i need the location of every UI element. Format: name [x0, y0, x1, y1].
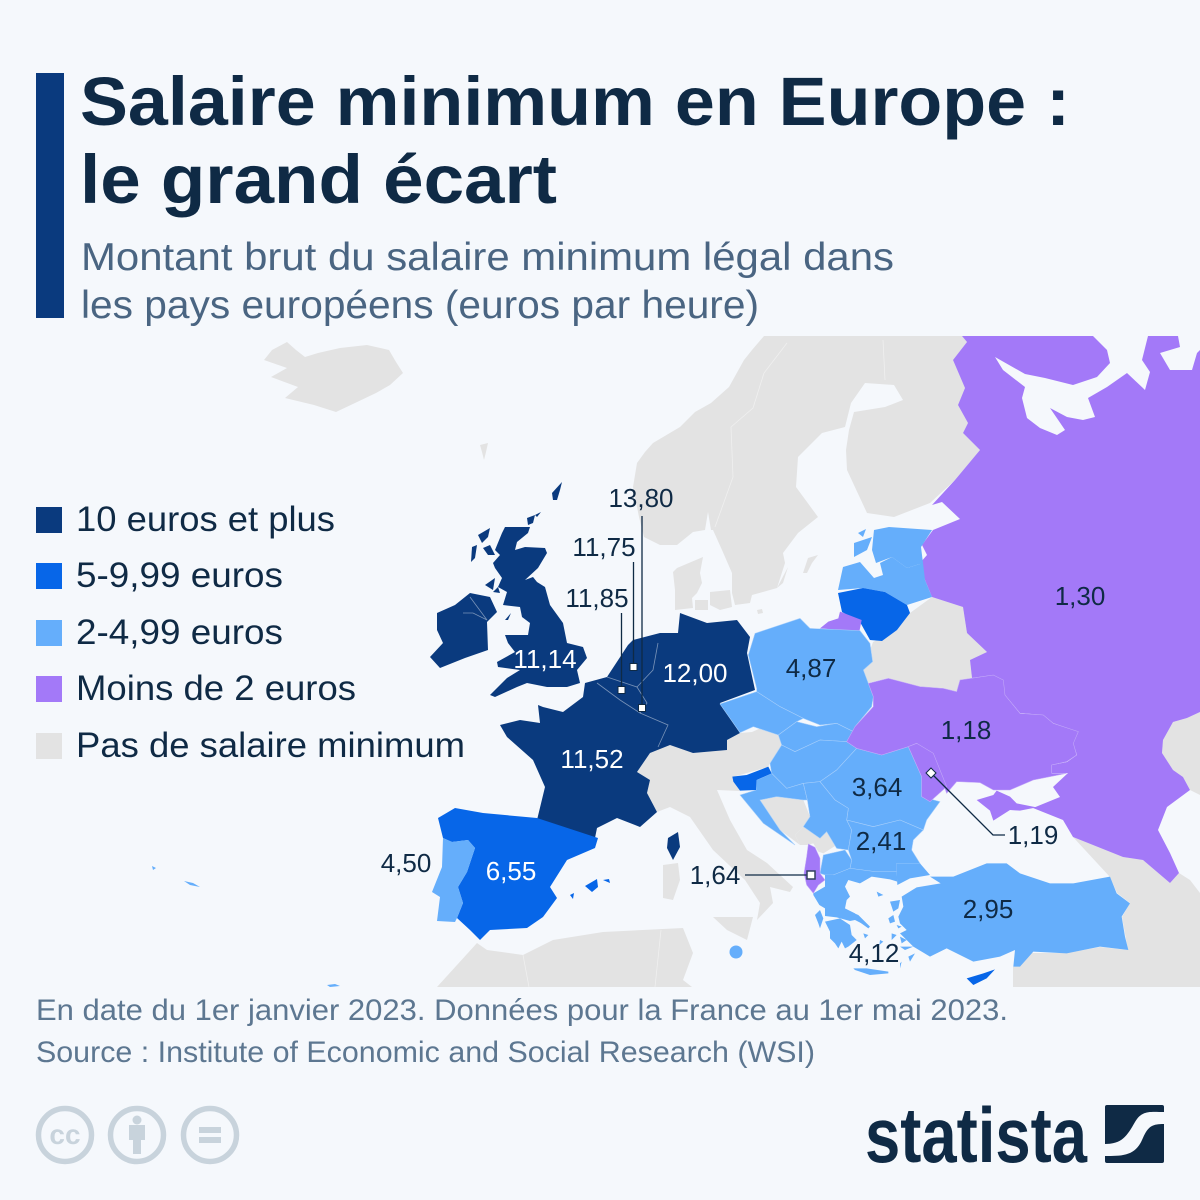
France, Benelux and Germany: [500, 613, 755, 838]
Slovenia: [732, 767, 772, 791]
legend: 10 euros et plus: 10 euros et plus: [76, 500, 335, 539]
title: Salaire minimum en Europe :: [80, 63, 1070, 140]
map of Europe: [152, 336, 1200, 987]
Slovakia: [778, 722, 853, 752]
Ireland: [430, 593, 497, 668]
Spain: 6,55: [438, 808, 598, 940]
Faroe Islands: [480, 443, 488, 460]
Scandinavia: [633, 336, 980, 605]
Greek islands: [815, 892, 915, 975]
White Sea: [995, 336, 1150, 435]
Belarus: [863, 597, 987, 692]
title accent bar: [36, 73, 64, 318]
map value labels: 11,75: [572, 532, 636, 562]
map value labels: 13,80: [608, 483, 674, 513]
leader: Luxembourg 13,80: [638, 516, 646, 712]
leader: Belgium 11,85: [618, 613, 625, 694]
Serbia: [803, 782, 852, 850]
statista logo: statista: [865, 1091, 1087, 1179]
title: [80, 63, 1070, 218]
Greek mainland border: [833, 868, 897, 875]
Portugal: 4,50: [432, 838, 475, 922]
legend: [36, 500, 465, 765]
leader: Netherlands 11,75: [630, 562, 637, 670]
map value labels: 1,64: [690, 860, 740, 890]
map value labels: 1,18: [941, 715, 991, 745]
leader: Moldova 1,19: [926, 768, 1005, 835]
Greece: 4,12: [813, 868, 897, 923]
Western European borders: [463, 597, 668, 747]
Malta: [730, 946, 742, 958]
Russia: 1,30: [920, 336, 1200, 883]
map value labels: 11,85: [565, 583, 629, 613]
Estonia, Latvia and islands: [838, 527, 932, 605]
Romania: 3,64: [820, 747, 940, 830]
map value labels: 12,00: [662, 658, 728, 688]
subtitle: les pays européens (euros par heure): [81, 284, 759, 327]
map value labels: 6,55: [486, 856, 536, 886]
legend: moins de 2 euros: Moins de 2 euros: [76, 669, 356, 708]
map value labels: 2,95: [963, 894, 1013, 924]
footnote and source: [36, 994, 1008, 1069]
Atlantic islands: [152, 866, 340, 987]
legend: pas de salaire minimum: Pas de salaire minimum: [76, 726, 465, 765]
icon: creative commons: cc: [49, 1119, 81, 1150]
Croatia: [740, 773, 807, 845]
Corsica: [667, 832, 680, 860]
Cyprus: [967, 969, 995, 985]
icon: creative commons: [38, 1108, 92, 1162]
North Africa: [437, 928, 693, 987]
Lithuania: [838, 588, 910, 641]
Denmark and Baltic islands: [673, 555, 818, 614]
leader: Albania 1,64: [745, 871, 815, 879]
Sardinia and Sicily: [663, 863, 753, 940]
icon: attribution: [110, 1108, 164, 1162]
Barents Sea inlet: [1160, 336, 1200, 370]
Balearic Islands: [570, 879, 610, 899]
Iceland: [264, 342, 403, 412]
Poland: 4,87: [748, 618, 873, 732]
map value labels: 4,50: [381, 848, 431, 878]
map value labels: 11,14: [513, 644, 577, 674]
Albania: 1,64: [804, 844, 825, 893]
map value labels: 4,12: [849, 938, 899, 968]
map value labels: 3,64: [852, 772, 902, 802]
Peloponnese: [825, 918, 857, 948]
British outer islands: [471, 482, 562, 620]
Bulgaria: 2,41: [847, 820, 923, 872]
legend: 5-9,99 euros: 5-9,99 euros: [76, 556, 283, 595]
title: le grand écart: [80, 141, 557, 218]
Bosnia: [760, 797, 810, 845]
legend: 2-4,99 euros: 2-4,99 euros: [76, 613, 283, 652]
Turkey: 2,95: [898, 863, 1130, 967]
Middle East and Caucasus: [1013, 837, 1200, 987]
Crimea: [977, 791, 1037, 821]
Montenegro and Kosovo: [795, 827, 837, 853]
North Macedonia: [820, 850, 852, 875]
footnote and source: En date du 1er janvier 2023. Données pour la France au 1er mai 2023.: [36, 994, 1008, 1027]
map value labels: 1,30: [1055, 581, 1105, 611]
map value labels: 11,52: [560, 744, 624, 774]
Czech Republic: [720, 692, 803, 735]
Central Alps and Italy: [637, 727, 793, 920]
map value labels: 1,19: [1008, 820, 1058, 850]
Nordic borders: [715, 343, 787, 527]
footnote and source: Source : Institute of Economic and Social Research (WSI): [36, 1036, 815, 1069]
subtitle: [81, 236, 894, 327]
Turkey in Europe: [897, 863, 930, 885]
Kaliningrad: [820, 612, 862, 632]
map value labels: 2,41: [856, 826, 906, 856]
Kazakhstan: [1162, 712, 1200, 795]
map value labels: 4,87: [786, 653, 836, 683]
Hungary: [770, 740, 857, 788]
subtitle: Montant brut du salaire minimum légal dans: [81, 236, 894, 279]
icon: no derivatives: [184, 1108, 236, 1162]
United Kingdom: [490, 527, 587, 697]
Ukraine: 1,18: [847, 675, 1078, 793]
map value labels: [381, 483, 1105, 968]
Eastern and southeastern Europe, scaled coordinates: [720, 612, 1130, 985]
Moldova: 1,19: [908, 743, 947, 802]
